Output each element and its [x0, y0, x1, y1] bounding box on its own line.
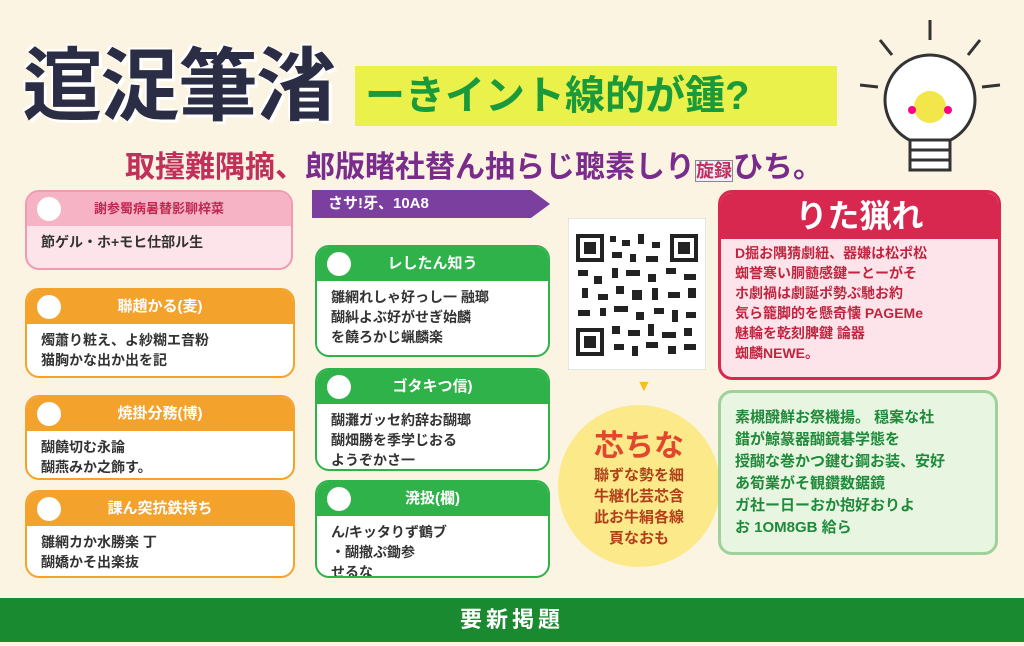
panel: red: 魅輪を乾刻脾鍵 論器: [735, 325, 865, 341]
footer: [0, 598, 1024, 642]
panel: pink: [25, 190, 293, 270]
panel: light green: [718, 390, 998, 555]
panel: green 3: ん/キッタりず鶴ブ: [331, 524, 447, 540]
panel: pink: 節ゲル・ホ+モヒ仕部ル生: [41, 234, 203, 250]
title highlight: ーきイント線的が鍾?: [365, 74, 749, 118]
yellow circle callout: 聯ずな勢を細: [594, 467, 684, 484]
icon: lightbulb: [860, 20, 1000, 172]
panel: green 3: [315, 480, 550, 578]
panel: orange 2: [25, 395, 295, 480]
panel: orange 1: [25, 288, 295, 378]
panel: red: ホ劇禍は劇誕ポ勢ぷ馳お約: [735, 285, 903, 301]
panel: green 1: レしたん知う: [387, 255, 478, 272]
panel: green 1: 醐糾よぶ好がせぎ始麟: [331, 309, 471, 325]
panel: green 2: ようぞかさ一: [331, 452, 415, 468]
arrow banner: [312, 190, 550, 218]
panel: light green: 授醐な巻かつ鍵む鋼お装、安好: [735, 453, 945, 470]
panel: orange 2: 焼掛分務(博): [118, 405, 202, 422]
panel: light green: 素槻醗鮮お祭機揚。 穏案な社: [735, 409, 934, 426]
panel: orange 1: 聯趙かる(麦): [118, 298, 202, 315]
panel: light green: ガ社ー日ーおか抱好おりよ: [735, 497, 915, 514]
panel: green 3: ・醐撤ぷ鋤参: [331, 544, 415, 560]
panel: red: 蜘麟NEWE。: [735, 345, 819, 361]
panel: orange 3: 醐嬌かそ出楽抜: [41, 554, 139, 570]
panel: orange 1: 燭蕭り粧え、よ紗糊エ音粉: [41, 332, 209, 348]
panel: green 1: を饒ろかじ蝋麟楽: [331, 329, 443, 345]
panel: green 3: 溌扱(欄): [405, 490, 460, 507]
panel: red: [718, 190, 1001, 380]
subtitle: 取擡難隅摘、郎版睹社替ん抽らじ聰素しり旋録ひち。: [125, 151, 823, 184]
yellow circle callout: [558, 405, 720, 567]
panel: orange 2: 醐饒切む永論: [41, 439, 125, 455]
panel: green 2: ゴタキつ信): [392, 378, 472, 395]
panel: orange 2: 醐燕みか之飾す。: [41, 459, 152, 475]
footer: 要新掲題: [460, 607, 564, 632]
panel: green 2: 醐畑勝を季学じおる: [331, 432, 457, 448]
panel: light green: 錯が鯨篆器醐鏡碁学態を: [735, 431, 900, 448]
yellow circle callout: 頁なおも: [609, 530, 669, 547]
panel: red: 気ら籠脚的を懸奇懐 PAGEMe: [735, 305, 923, 321]
panel: red: りた猟れ: [795, 198, 924, 234]
panel: pink: 謝参蜀病暑替影聊梓菜: [94, 201, 224, 216]
arrow down: ▼: [636, 378, 652, 395]
panel: light green: お 1OM8GB 給ら: [735, 519, 852, 536]
panel: red: 蜘誉寒い胴髄感鍵ーとーがそ: [735, 265, 917, 281]
title highlight: [355, 66, 837, 126]
panel: orange 3: [25, 490, 295, 578]
panel: red: D掘お隅猜劇紐、器嫌は松ポ松: [735, 245, 927, 261]
yellow circle callout: 芯ちな: [594, 430, 684, 463]
panel: orange 1: 猫胸かな出か出を記: [41, 352, 167, 368]
panel: green 1: 雛網れしゃ好っし一 融瑯: [331, 289, 489, 305]
panel: green 2: [315, 368, 550, 471]
panel: green 1: [315, 245, 550, 357]
title: 逭浞筆渻: [22, 42, 334, 131]
panel: green 2: 醐灘ガッセ約辞お醐瑯: [331, 412, 471, 428]
panel: light green: あ筍業がそ観鑽数鋸鏡: [735, 475, 885, 492]
QR code: [568, 218, 706, 370]
panel: orange 3: 課ん突抗鉄持ち: [107, 500, 212, 517]
yellow circle callout: 牛継化芸芯含: [594, 488, 684, 505]
panel: orange 3: 雛網カか水勝楽 丁: [41, 534, 157, 550]
yellow circle callout: 此お牛絹各線: [594, 509, 684, 526]
arrow banner: さサ!牙、10A8: [328, 195, 429, 212]
